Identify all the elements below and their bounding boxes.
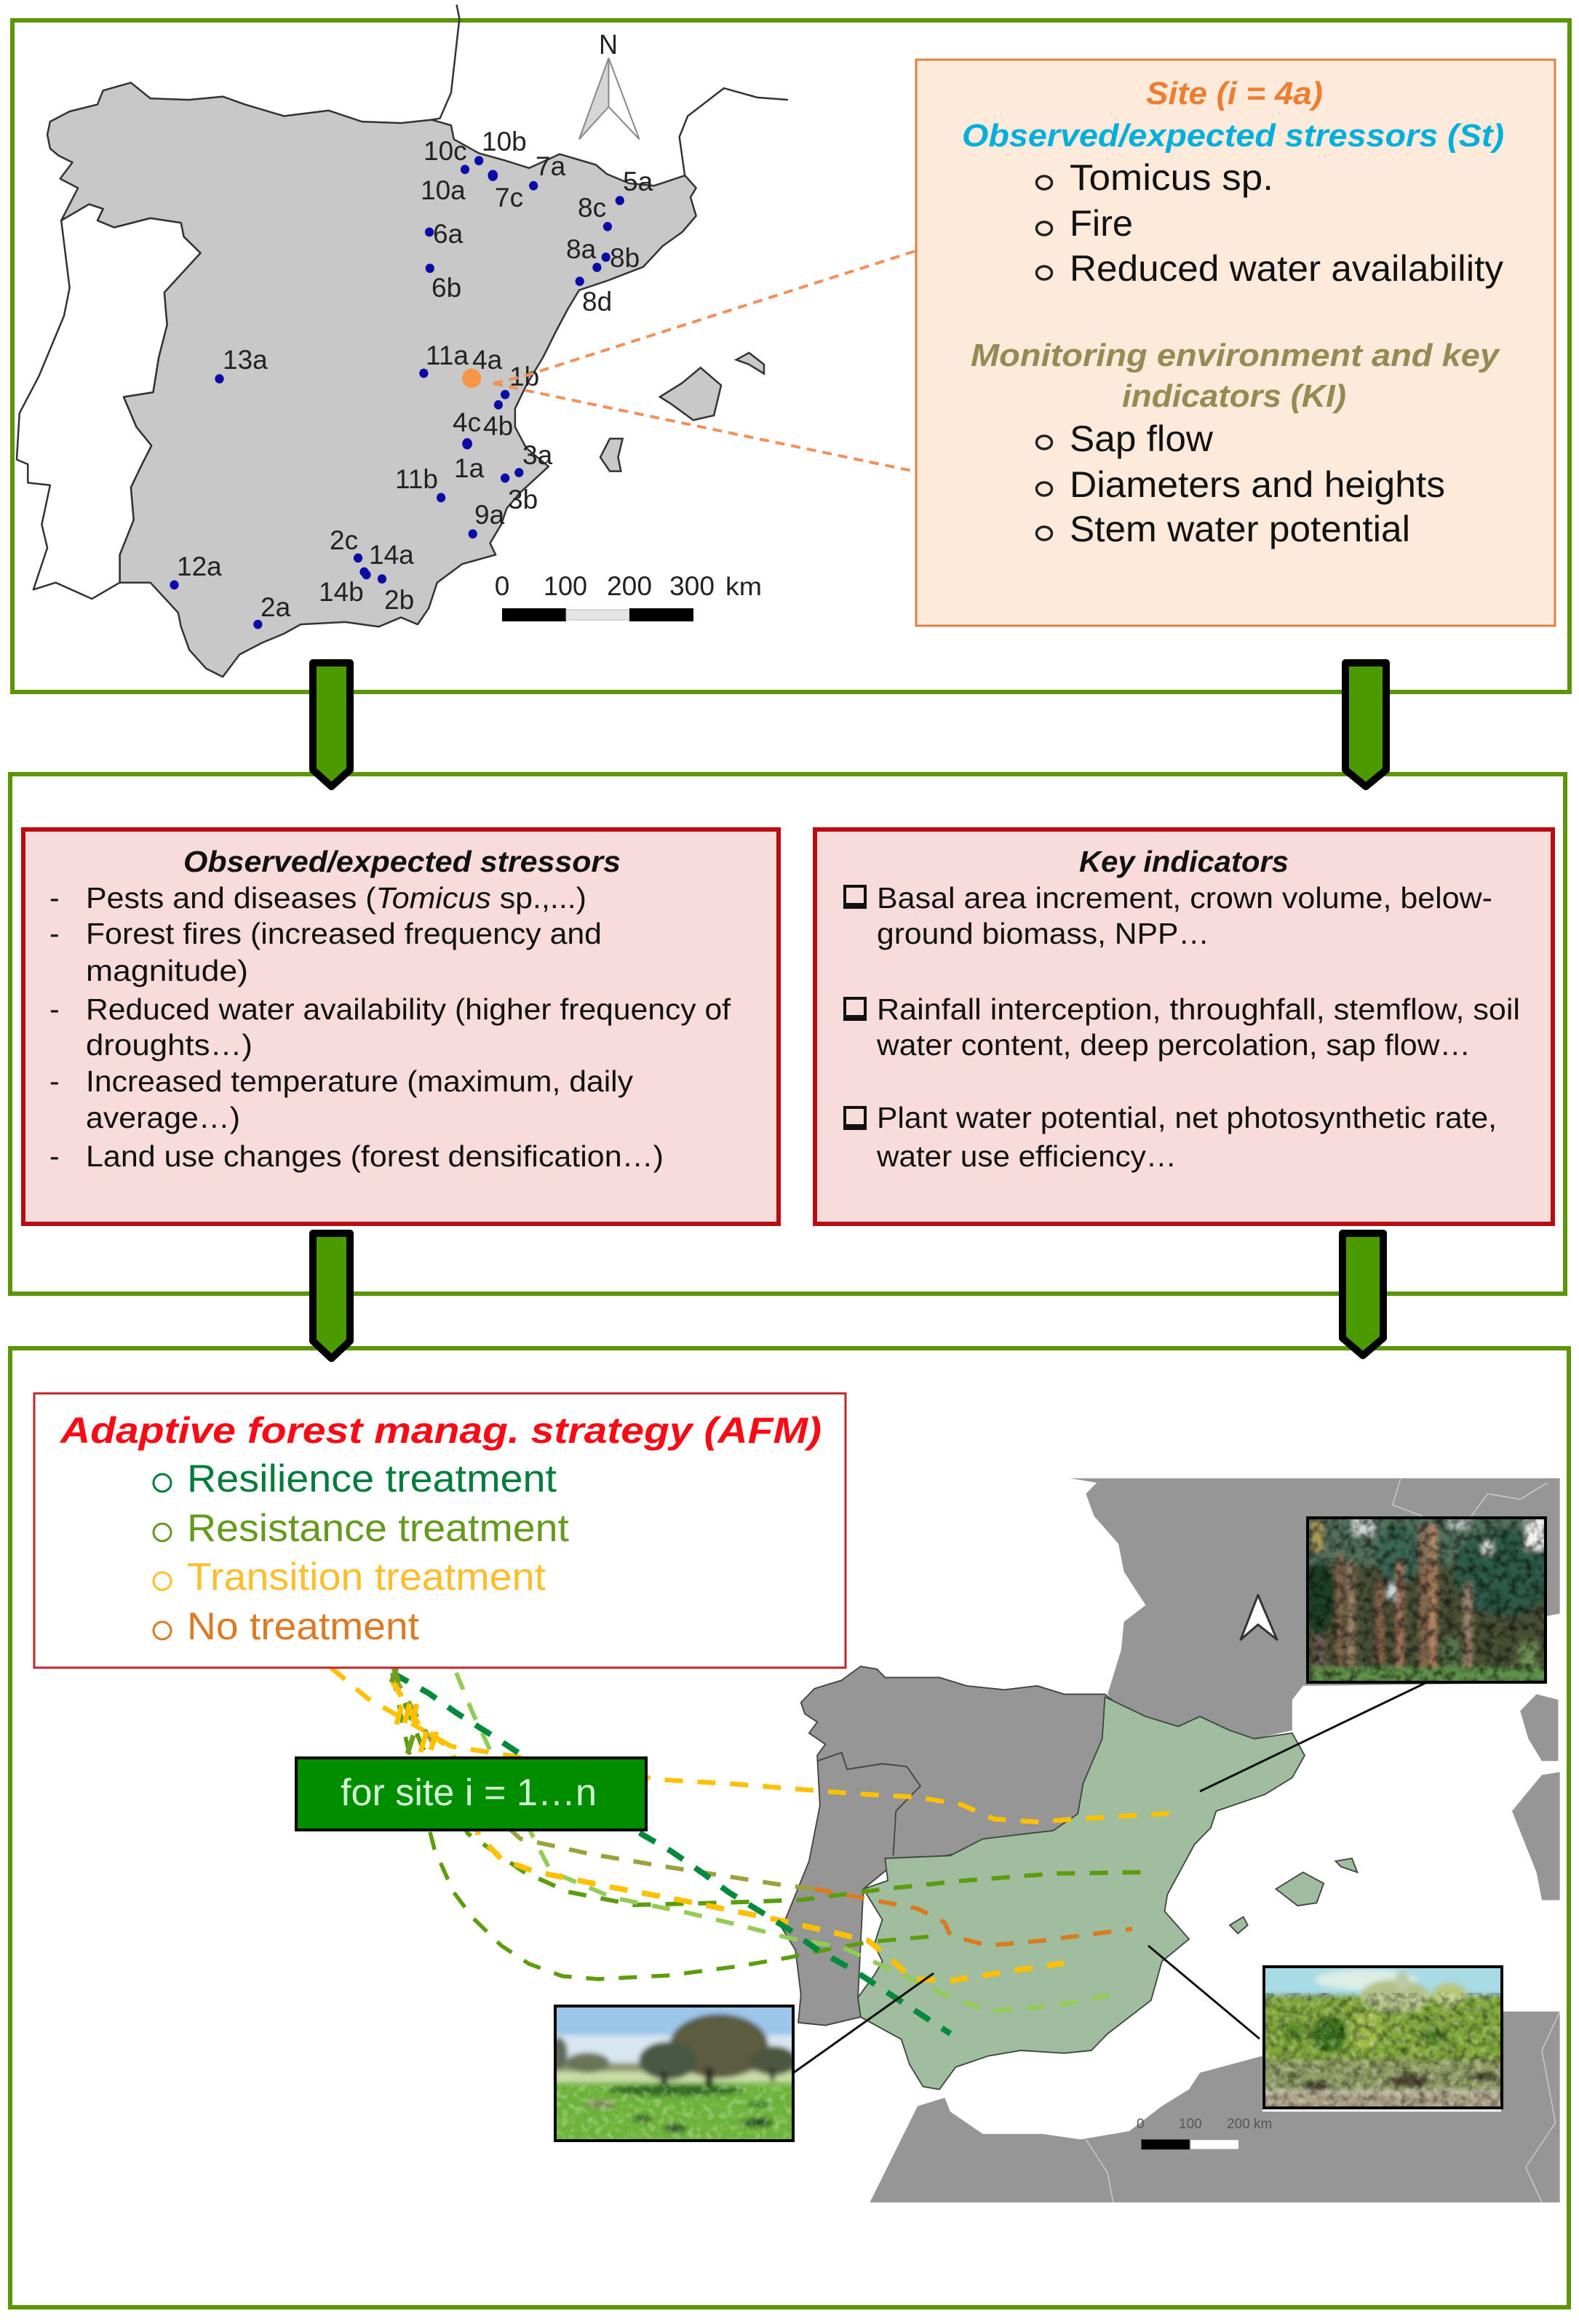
- line: resistance treatment south: [392, 1673, 934, 1979]
- map: site labels: 10b: [482, 127, 527, 156]
- panel: adaptive forest management: [10, 1348, 1569, 2307]
- map: site labels: 3b: [508, 485, 538, 514]
- map: site labels: 9a: [474, 500, 505, 530]
- list: stressors: Land use changes (forest densification…): [86, 1139, 664, 1173]
- list: key indicators: Basal area increment, crown volume, below-: [877, 881, 1492, 915]
- map: site labels: 11b: [395, 464, 438, 494]
- list: stressors: Fire: [1070, 203, 1133, 244]
- map: Portugal border: [817, 1753, 920, 1855]
- map: site labels: 8c: [578, 193, 606, 223]
- map: site labels: 14a: [369, 540, 414, 570]
- list: stressors: -: [49, 1064, 60, 1098]
- heading: key indicators: Key indicators: [1079, 845, 1289, 878]
- line: resistance treatment centre: [392, 1673, 1148, 1905]
- map: scale bar: 200: [607, 571, 652, 601]
- map: Spain land area: [47, 83, 696, 677]
- map: site labels: 10a: [421, 175, 466, 205]
- map: scale bar labels: 200 km: [1227, 2117, 1272, 2132]
- map: France coastline: [431, 4, 788, 176]
- line: light resilience treatment: [456, 1673, 1113, 2011]
- map: scale bar: km: [725, 573, 762, 601]
- callout: leader lines to photos: [793, 1683, 1425, 2073]
- list: stressors: Increased temperature (maximum, daily: [86, 1064, 634, 1098]
- line: converging dash cluster: [391, 1668, 437, 1754]
- panel: observed and expected stressors: [23, 829, 779, 1224]
- list: stressors: Reduced water availability: [1070, 248, 1503, 289]
- arrow: map to stressors: [313, 663, 350, 787]
- map: site labels: 1a: [454, 453, 485, 483]
- map: site labels: 2b: [384, 585, 414, 615]
- list: monitoring indicators: [1036, 418, 1445, 549]
- panel: key indicators: [815, 829, 1553, 1224]
- list: stressors: -: [49, 1139, 60, 1173]
- panel: stressors and indicators container: [10, 774, 1565, 1294]
- map: Iberian Peninsula grey: [782, 1666, 1113, 2026]
- list: monitoring indicators: Sap flow: [1070, 418, 1214, 459]
- map: scale bar labels: 0: [1137, 2117, 1145, 2132]
- map: site labels: 6a: [433, 219, 464, 249]
- panel: site map and site details: [12, 20, 1570, 692]
- map: site labels: 1b: [509, 362, 539, 391]
- list: stressors: [49, 881, 731, 1173]
- panel: site 4a details: [916, 60, 1555, 626]
- line: transition treatment south: [392, 1681, 1064, 1981]
- map: Balearic islands: [600, 353, 764, 471]
- list: stressors: Forest fires (increased frequency and: [86, 917, 602, 950]
- list: key indicators: water content, deep percolation, sap flow…: [876, 1028, 1471, 1062]
- legend item: resistance treatment: Resistance treatment: [187, 1507, 569, 1550]
- list: key indicators: Rainfall interception, throughfall, stemflow, soil: [877, 992, 1520, 1026]
- label: for site i = 1...n: [296, 1758, 646, 1830]
- map: site labels: 5a: [623, 167, 653, 196]
- line: olive treatment: [392, 1673, 814, 1889]
- map: France and land to the north: [1070, 1479, 1560, 1739]
- line: resilience treatment: [392, 1673, 950, 2034]
- heading: observed stressors: Observed/expected stressors (St): [962, 118, 1504, 154]
- map: site labels: 6b: [431, 273, 461, 303]
- list: stressors: Reduced water availability (higher frequency of: [86, 992, 731, 1026]
- legend item: transition treatment: Transition treatment: [187, 1556, 546, 1599]
- map: site labels: 4b: [483, 411, 513, 441]
- photo: young shrubland: [1260, 1963, 1508, 2114]
- map: site labels: 4c: [453, 407, 481, 437]
- label: for site i = 1...n: for site i = 1…n: [341, 1772, 597, 1814]
- heading: monitoring environment: [971, 338, 1501, 414]
- map: site labels: 8d: [582, 287, 612, 317]
- map: site labels: 7a: [536, 151, 566, 181]
- photo: pine forest: [1302, 1514, 1555, 1689]
- heading: AFM strategy: Adaptive forest manag. strategy (AFM): [59, 1410, 822, 1451]
- line: no treatment: [814, 1889, 1132, 1946]
- map: site labels: 11a: [426, 341, 469, 370]
- map: highlighted site 4a: [462, 369, 481, 388]
- list: key indicators: Plant water potential, net photosynthetic rate,: [877, 1101, 1497, 1134]
- map: north letter: N: [599, 30, 618, 60]
- map: study site markers: [170, 156, 624, 629]
- list: stressors: -: [49, 881, 60, 915]
- map: site labels: 13a: [223, 345, 268, 375]
- list: key indicators: water use efficiency…: [876, 1139, 1177, 1173]
- list: key indicators: ground biomass, NPP…: [877, 917, 1209, 950]
- map: Europe and Iberia with treatment regions: [782, 1479, 1560, 2202]
- photo: dehesa oak meadow: [550, 2002, 799, 2144]
- heading: observed stressors: Observed/expected stressors: [183, 845, 621, 878]
- map: scale bar: 100: [544, 571, 587, 601]
- legend: adaptive forest management strategy: [34, 1393, 846, 1668]
- map: site labels: 2a: [260, 592, 291, 622]
- list: stressors: -: [49, 992, 60, 1026]
- map: faint country borders: [1086, 1479, 1560, 2202]
- map: site labels: 4a: [472, 345, 503, 375]
- heading: monitoring environment: Monitoring environment and key: [971, 338, 1501, 373]
- map: site labels: 2c: [330, 525, 358, 555]
- line: transition treatment north: [331, 1668, 1184, 1822]
- map: site labels: 12a: [177, 552, 222, 581]
- list: key indicators: [845, 881, 1520, 1173]
- list: stressors: Tomicus sp.: [1070, 157, 1273, 198]
- map: Balearic islands: [1230, 1858, 1357, 1933]
- map: treatment region green: [858, 1697, 1305, 2090]
- map: scale bar: [495, 571, 762, 621]
- list: monitoring indicators: Stem water potential: [1070, 509, 1410, 549]
- map: Corsica and Sardinia: [1512, 1694, 1560, 1900]
- map: scale bar: 300: [669, 571, 715, 601]
- list: stressors: droughts…): [86, 1028, 252, 1062]
- map: north arrow: [1241, 1595, 1277, 1639]
- map: site labels: 8a: [566, 234, 597, 264]
- arrow: stressors to management: [313, 1233, 350, 1358]
- map: site labels: 3a: [522, 440, 553, 470]
- legend item: no treatment: No treatment: [187, 1605, 419, 1648]
- map: scale bar: 0: [495, 571, 509, 601]
- map: Iberian Peninsula with study sites: [17, 4, 788, 677]
- list: stressors: magnitude): [86, 954, 248, 987]
- list: stressors: -: [49, 917, 60, 950]
- map: site labels: 8b: [610, 243, 640, 273]
- callout: orange dashed lines from site 4a to detail box: [493, 251, 915, 471]
- legend item: resilience treatment: Resilience treatment: [187, 1457, 557, 1500]
- map: north arrow: [579, 58, 640, 139]
- map: scale bar: [1141, 2139, 1239, 2149]
- list: stressors: [1036, 157, 1503, 289]
- list: stressors: average…): [86, 1101, 240, 1134]
- list: stressors: Pests and diseases ( Tomicus sp.,...): [86, 881, 586, 915]
- map: site labels: [177, 127, 653, 622]
- map: North Africa: [870, 2011, 1560, 2202]
- heading: site: Site (i = 4a): [1146, 76, 1323, 111]
- map: site labels: 7c: [495, 183, 523, 212]
- map: site labels: 10c: [423, 136, 467, 166]
- list: monitoring indicators: Diameters and heights: [1070, 464, 1445, 505]
- map: scale bar labels: 100: [1179, 2117, 1202, 2132]
- map: site labels: 14b: [319, 577, 364, 607]
- map: Portugal coastline: [17, 204, 201, 599]
- arrow: details to indicators: [1345, 663, 1386, 787]
- heading: monitoring environment: indicators (KI): [1122, 378, 1346, 414]
- chart: dashed treatment lines from legend to sites: [331, 1668, 1184, 2034]
- arrow: indicators to management: [1343, 1233, 1383, 1356]
- map: scale bar labels: [1137, 2117, 1272, 2132]
